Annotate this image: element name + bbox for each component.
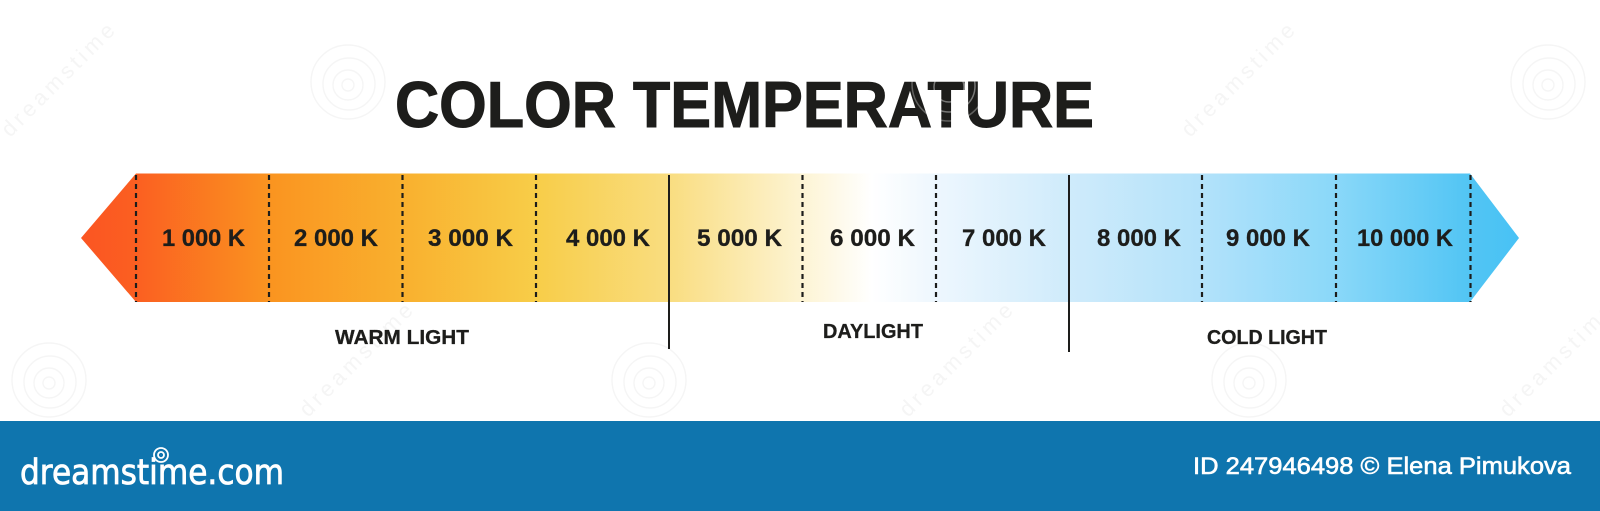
chart: color temperature scale [81, 174, 1519, 352]
temperature labels: 4 000 K [566, 225, 651, 252]
temperature labels: 8 000 K [1097, 225, 1182, 252]
text: dreamstime [1176, 18, 1300, 142]
solid zone dividers [669, 175, 1069, 352]
gradient arrow bar [81, 174, 1519, 302]
footer band [0, 421, 1600, 511]
temperature labels: 1 000 K [162, 225, 246, 252]
label: cold light: COLD LIGHT [1207, 327, 1327, 349]
image credit: ID 247946498 © Elena Pimukova [1193, 453, 1572, 480]
temperature labels: 7 000 K [962, 225, 1047, 252]
temperature labels: 9 000 K [1226, 225, 1311, 252]
temperature labels: 3 000 K [428, 225, 514, 252]
label: warm light: WARM LIGHT [335, 327, 469, 349]
temperature labels: 10 000 K [1357, 225, 1454, 252]
text: dreamstime [294, 298, 418, 422]
label: daylight: DAYLIGHT [823, 321, 923, 343]
title: COLOR TEMPERATURE [395, 68, 1094, 141]
logo text: dreamstime.com [20, 453, 284, 493]
temperature labels: 5 000 K [697, 225, 783, 252]
temperature labels: 6 000 K [830, 225, 916, 252]
temperature labels: 2 000 K [294, 225, 379, 252]
text: dreamstime [894, 298, 1018, 422]
temperature labels [162, 225, 1454, 252]
icon: logo swirl [154, 448, 168, 462]
dashed dividers [136, 175, 1470, 302]
